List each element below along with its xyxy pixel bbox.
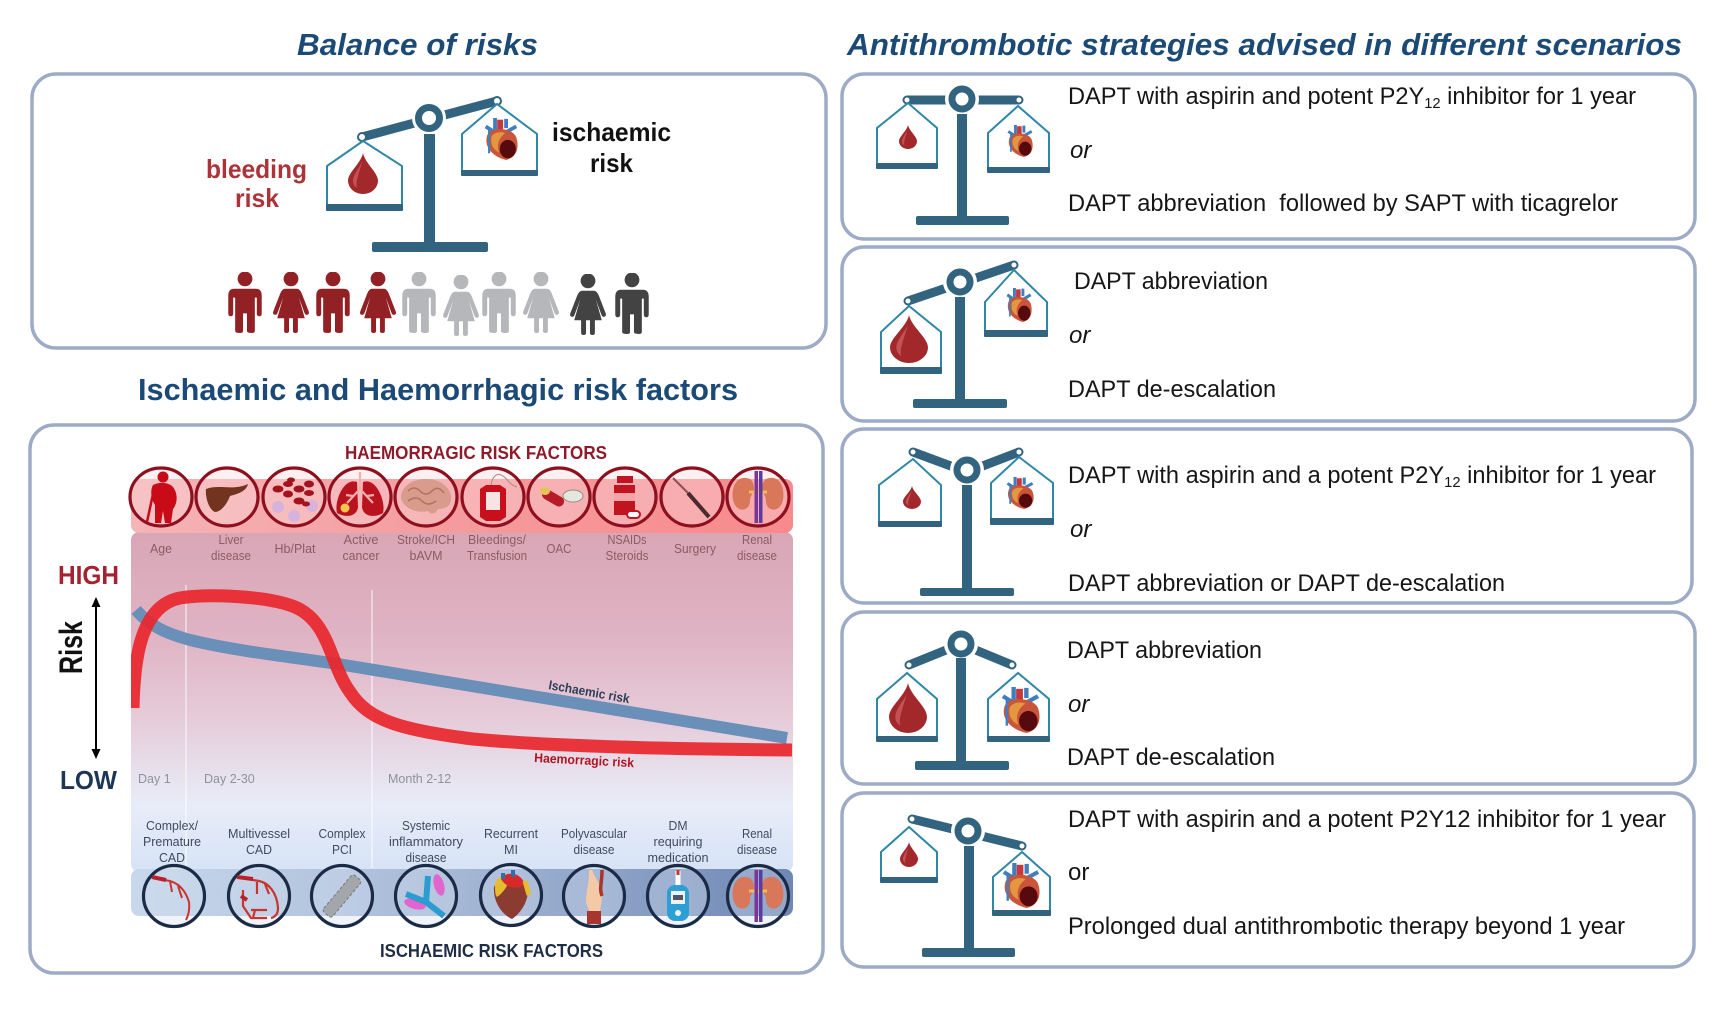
labels: haemorrhagic factors: Bleedings/ (468, 532, 526, 547)
labels: ischaemic factors: DM (668, 818, 688, 833)
text: scenario 1: inhibitor for 1 year (1441, 83, 1636, 110)
text: scenario 4 (1067, 637, 1275, 771)
labels: ischaemic factors: Renal (742, 826, 772, 841)
label: bleeding risk (206, 154, 307, 213)
labels: time axis (138, 772, 451, 786)
label: ischaemic risk: ischaemic (552, 117, 671, 147)
text: scenario 2: DAPT abbreviation (1074, 268, 1268, 295)
label: LOW: LOW (60, 765, 117, 795)
labels: haemorrhagic factors: Age (150, 541, 172, 556)
heading: antithrombotic strategies: Antithrombotic strategies advised in different scenarios (846, 27, 1682, 62)
text: scenario 3: inhibitor for 1 year (1461, 462, 1656, 489)
icon: stent (312, 866, 372, 926)
label: ischaemic risk curve: Ischaemic risk (547, 677, 632, 706)
curve: haemorrhagic risk (133, 596, 792, 750)
label: Risk: Risk (53, 621, 89, 674)
text: scenario 2: DAPT de-escalation (1068, 376, 1276, 403)
labels: ischaemic factors: Multivessel (228, 826, 290, 841)
text: scenario 1: DAPT with aspirin and potent P2Y (1068, 83, 1430, 110)
icon: artery (564, 866, 624, 926)
icon: blood cells and platelets (263, 468, 325, 526)
icon: age (130, 468, 192, 526)
labels: ischaemic factors: requiring (654, 834, 702, 849)
text: scenario 3: DAPT abbreviation or DAPT de-escalation (1068, 570, 1505, 597)
icon: multivessel coronary (228, 866, 290, 926)
icon: liver (196, 468, 258, 526)
text: scenario 1: 12 (1424, 95, 1441, 112)
labels: ischaemic factors: inflammatory (389, 834, 463, 849)
labels: time axis: Day 1 (138, 772, 171, 786)
label: HIGH: HIGH (58, 560, 119, 590)
icon: medication bottle (594, 468, 656, 526)
icon: complex coronary (144, 866, 204, 926)
labels: haemorrhagic factors: Renal (742, 532, 772, 547)
heading: ischaemic and haemorrhagic risk factors: Ischaemic and Haemorrhagic risk factors (138, 372, 738, 407)
heading: haemorrhagic risk factors: HAEMORRAGIC RISK FACTORS (345, 443, 607, 463)
labels: ischaemic factors: Systemic (402, 818, 450, 833)
text: scenario 5: Prolonged dual antithrombotic therapy beyond 1 year (1068, 913, 1625, 940)
labels: haemorrhagic factors: Steroids (606, 548, 649, 563)
icon: main scale tilted toward bleeding (326, 97, 538, 252)
heading: ischaemic risk factors: ISCHAEMIC RISK FACTORS (380, 941, 603, 961)
icon: kidneys (haemorrhagic) (727, 468, 789, 526)
text: scenario 3: DAPT with aspirin and a potent P2Y (1068, 462, 1450, 489)
icon: scale tilted to large drop (880, 262, 1048, 408)
labels: ischaemic factors: disease (406, 850, 446, 865)
panel: scenario 4 (842, 612, 1695, 784)
labels: ischaemic factors: Premature (143, 834, 201, 849)
text: scenario 3 (1068, 462, 1656, 597)
labels: ischaemic factors: Complex/ (146, 818, 198, 833)
icon: antibody (396, 866, 456, 926)
text: scenario 1 (1068, 83, 1636, 217)
panel: scenario 3 (842, 429, 1692, 603)
labels: time axis: Month 2-12 (388, 772, 451, 786)
labels: haemorrhagic factors: OAC (546, 541, 572, 556)
text: scenario 4: DAPT abbreviation (1067, 637, 1262, 664)
labels: haemorrhagic factors: disease (211, 548, 251, 563)
text: scenario 3: or (1070, 516, 1092, 543)
text: scenario 3: 12 (1444, 474, 1461, 491)
band: ischaemic icons (131, 869, 793, 916)
icon: scale arms raised, small drop and small heart (878, 448, 1054, 596)
icon: glucose meter (648, 866, 708, 926)
panel: balance of risks (32, 74, 826, 348)
labels: ischaemic factors: CAD (246, 842, 272, 857)
labels: ischaemic factors: disease (574, 842, 614, 857)
labels: time axis: Day 2-30 (204, 772, 255, 786)
icon: oral anticoagulant pills (528, 468, 590, 526)
panel: scenario 5 (842, 793, 1694, 967)
labels: ischaemic factors: medication (648, 850, 708, 865)
text: scenario 5 (1068, 806, 1666, 940)
icon: blood bag (462, 468, 524, 526)
labels: haemorrhagic factors: Hb/Plat (274, 541, 316, 556)
text: scenario 1: or (1070, 137, 1092, 164)
panel: risk factors chart (30, 425, 823, 973)
label: ischaemic risk (552, 117, 671, 178)
labels: ischaemic factors: PCI (332, 842, 352, 857)
labels: haemorrhagic factors: Transfusion (467, 548, 527, 563)
panel: scenario 2 (842, 247, 1695, 421)
chart background (131, 532, 793, 872)
text: scenario 5: DAPT with aspirin and a potent P2Y12 inhibitor for 1 year (1068, 806, 1666, 833)
icon: scale arms lowered, large drop and large heart (876, 627, 1050, 770)
icon: balanced scale, small drop and small heart (876, 82, 1050, 225)
labels: haemorrhagic factors: bAVM (410, 548, 442, 563)
icon: lungs with tumour (329, 468, 391, 526)
labels: haemorrhagic factors (150, 532, 777, 563)
label: haemorrhagic risk curve: Haemorragic risk (534, 750, 635, 770)
labels: ischaemic factors: Complex (318, 826, 366, 841)
labels: haemorrhagic factors: NSAIDs (608, 532, 647, 547)
text: scenario 2: or (1069, 322, 1091, 349)
labels: haemorrhagic factors: Stroke/ICH (397, 532, 455, 547)
labels: haemorrhagic factors: Active (344, 532, 378, 547)
text: scenario 4: or (1068, 691, 1090, 718)
labels: ischaemic factors: CAD (159, 850, 185, 865)
labels: haemorrhagic factors: Surgery (674, 541, 716, 556)
arrow: risk axis (92, 597, 100, 759)
icon: brain (395, 468, 457, 526)
label: ischaemic risk: risk (590, 148, 633, 178)
text: scenario 1: DAPT abbreviation followed by SAPT with ticagrelor (1068, 190, 1618, 217)
labels: haemorrhagic factors: Liver (218, 532, 244, 547)
panel: scenario 1 (842, 74, 1695, 239)
text: scenario 5: or (1068, 859, 1089, 886)
icon: row of patients (228, 272, 649, 336)
curve: ischaemic risk (136, 610, 787, 738)
labels: haemorrhagic factors: cancer (342, 548, 380, 563)
icon: kidneys (ischaemic) (728, 866, 788, 926)
labels: haemorrhagic factors: disease (737, 548, 777, 563)
text: scenario 4: DAPT de-escalation (1067, 744, 1275, 771)
label: bleeding risk: risk (235, 183, 280, 213)
labels: ischaemic factors (143, 818, 777, 865)
labels: ischaemic factors: MI (504, 842, 518, 857)
labels: ischaemic factors: disease (737, 842, 777, 857)
icon: heart (480, 864, 542, 926)
label: bleeding risk: bleeding (206, 154, 307, 184)
icon: scale tilted to large heart (880, 814, 1051, 957)
text: scenario 2 (1068, 268, 1276, 403)
labels: ischaemic factors: Recurrent (484, 826, 538, 841)
labels: ischaemic factors: Polyvascular (561, 826, 628, 841)
icon: scalpel (661, 468, 723, 526)
heading: balance of risks: Balance of risks (297, 27, 538, 62)
band: haemorrhagic icons (131, 479, 793, 533)
